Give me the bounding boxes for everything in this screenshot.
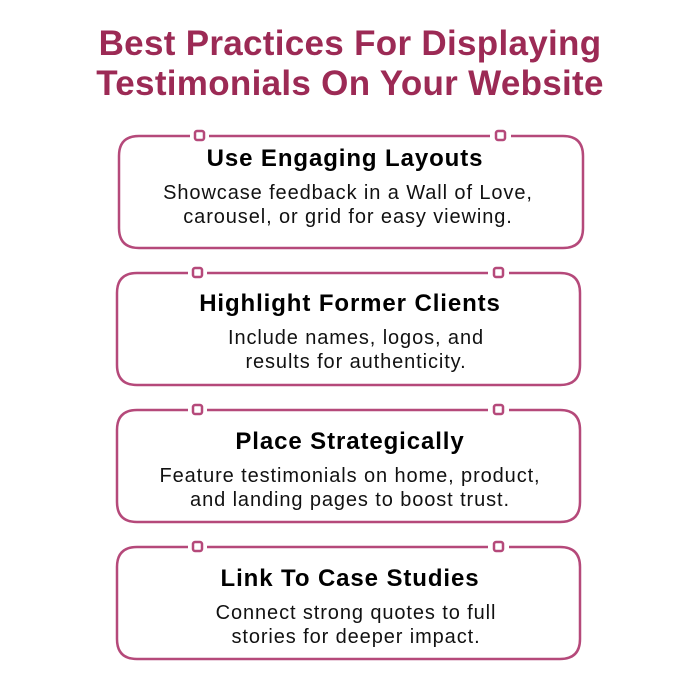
card 4 text: stories for deeper impact.	[231, 626, 481, 648]
card 3 text	[159, 428, 541, 511]
card 2 text	[199, 290, 501, 373]
card 4 text: Link To Case Studies	[221, 565, 479, 592]
card 1 text: carousel, or grid for easy viewing.	[183, 206, 513, 228]
card 2 text: Include names, logos, and	[228, 327, 484, 349]
card 3 text: and landing pages to boost trust.	[190, 489, 510, 511]
frame 3	[117, 405, 580, 522]
card 4 text	[216, 565, 496, 648]
card 2 text: Highlight Former Clients	[199, 290, 501, 317]
title: Best Practices For Displaying	[99, 24, 601, 63]
frame 1	[119, 131, 583, 248]
title	[96, 24, 604, 103]
card 1 text: Use Engaging Layouts	[207, 145, 483, 172]
card 1 text: Showcase feedback in a Wall of Love,	[163, 182, 533, 204]
title: Testimonials On Your Website	[96, 64, 604, 103]
card 4 text: Connect strong quotes to full	[216, 602, 496, 624]
card 2 text: results for authenticity.	[245, 351, 467, 373]
frame 4	[117, 542, 580, 659]
card 3 text: Feature testimonials on home, product,	[159, 465, 541, 487]
card 1 text	[163, 145, 533, 228]
frame 2	[117, 268, 580, 385]
card 3 text: Place Strategically	[235, 428, 465, 455]
